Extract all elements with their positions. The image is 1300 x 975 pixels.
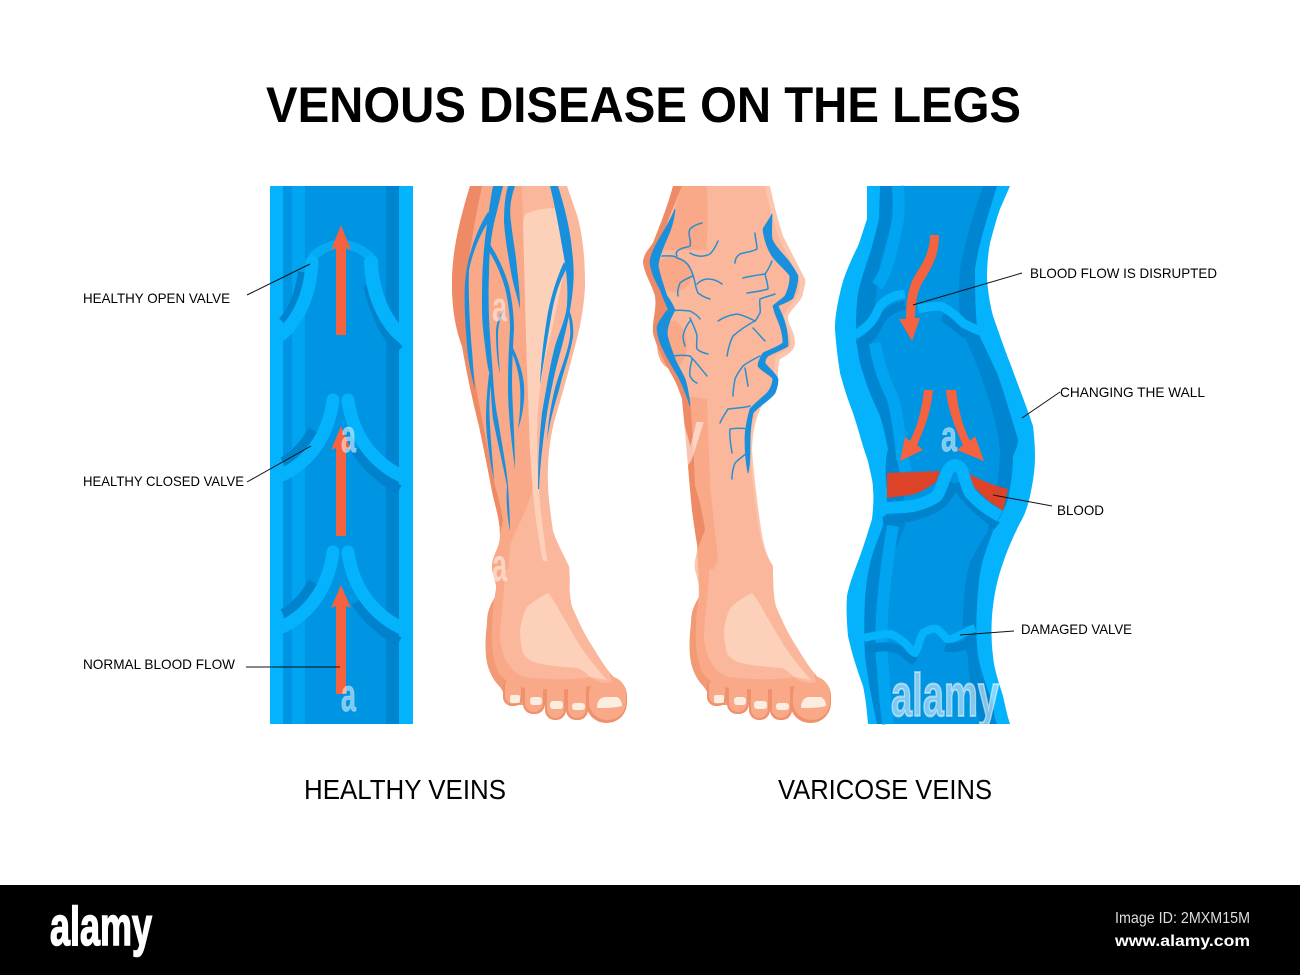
healthy leg veins xyxy=(465,186,574,531)
footer logo: alamy xyxy=(50,895,152,957)
arrow: flow up 3 xyxy=(331,585,351,694)
healthy open valve xyxy=(277,244,404,338)
leg shape xyxy=(452,186,585,600)
watermark: a: a xyxy=(492,539,507,591)
watermark: a: a xyxy=(492,283,507,330)
vein wall xyxy=(835,186,1035,724)
healthy closed valve xyxy=(277,394,404,477)
foot top xyxy=(500,560,612,683)
vein interior dark xyxy=(856,186,1018,724)
panel: healthy leg xyxy=(452,186,627,723)
mid tone xyxy=(452,186,533,600)
panel: varicose vein xyxy=(835,186,1035,729)
foot xyxy=(486,560,627,723)
panel: healthy vein xyxy=(270,186,413,724)
leg main tone xyxy=(650,186,800,605)
foot edge xyxy=(486,590,627,705)
label: changing the wall: CHANGING THE WALL xyxy=(1060,384,1205,400)
vein centre xyxy=(872,186,1000,724)
watermark: a: a xyxy=(941,412,957,461)
website: www.alamy.com xyxy=(1114,933,1250,950)
heading: healthy veins: HEALTHY VEINS xyxy=(304,774,506,805)
watermark: a: a xyxy=(341,669,356,721)
healthy closed valve lower xyxy=(277,546,404,629)
calf highlight xyxy=(523,208,565,566)
arrow: flow left xyxy=(900,390,933,461)
watermark: y: y xyxy=(676,400,705,467)
arrow: flow up 2 xyxy=(331,426,351,536)
watermark: alamy: alamy xyxy=(891,662,999,729)
foot highlight xyxy=(520,593,607,680)
label: damaged valve: DAMAGED VALVE xyxy=(1021,621,1132,637)
label: healthy open valve: HEALTHY OPEN VALVE xyxy=(83,290,230,306)
arrow: flow right xyxy=(946,390,984,461)
varicose veins thick xyxy=(650,209,798,473)
knee mid tones xyxy=(654,186,718,600)
label: normal blood flow: NORMAL BLOOD FLOW xyxy=(83,656,236,672)
leg shape xyxy=(643,186,805,605)
heading: varicose veins: VARICOSE VEINS xyxy=(778,774,992,805)
blood pool xyxy=(887,471,1008,511)
disrupted valve xyxy=(855,294,980,335)
label: blood: BLOOD xyxy=(1057,502,1104,518)
label: blood flow is disrupted: BLOOD FLOW IS DISRUPTED xyxy=(1030,265,1217,281)
image id: Image ID: 2MXM15M xyxy=(1115,910,1250,927)
varicose veins thin xyxy=(662,223,775,479)
valve shadows xyxy=(283,272,399,642)
blood-filled valve xyxy=(880,465,1000,516)
title: VENOUS DISEASE ON THE LEGS xyxy=(266,77,1021,133)
panel: varicose leg xyxy=(643,186,831,723)
shaded side xyxy=(643,186,705,548)
arrow: disrupted flow xyxy=(899,235,939,341)
footer bar xyxy=(0,885,1300,975)
valve shadows xyxy=(857,305,997,662)
watermark: a: a xyxy=(341,410,356,462)
leader lines xyxy=(246,264,1060,667)
foot mid tone xyxy=(492,566,612,690)
arrow: flow up 1 xyxy=(331,225,351,335)
damaged valve xyxy=(864,628,975,653)
toes xyxy=(503,676,627,723)
label: healthy closed valve: HEALTHY CLOSED VALVE xyxy=(83,473,244,489)
shaded side xyxy=(452,186,503,535)
lighter band xyxy=(875,186,906,724)
foot xyxy=(690,560,831,723)
